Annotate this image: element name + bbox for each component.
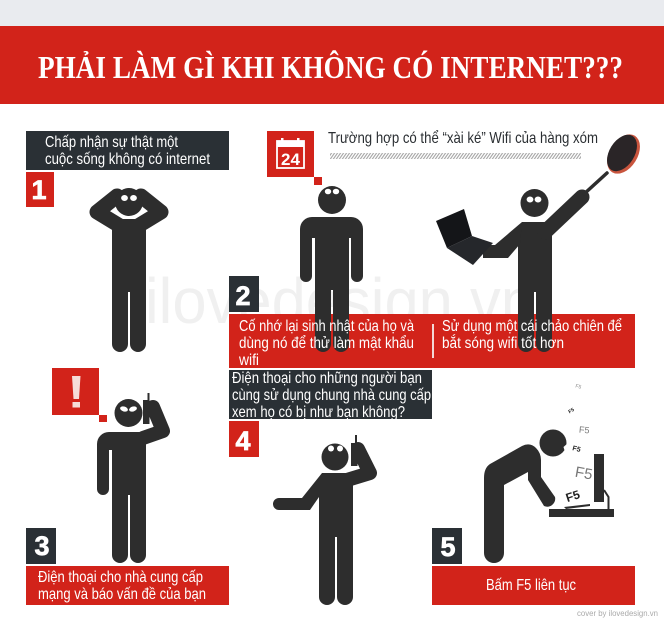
title banner <box>0 26 664 104</box>
icon: laptop <box>436 209 493 265</box>
F5 key labels: F5 <box>579 425 590 435</box>
panel: step 4: cùng sử dụng chung nhà cung cấp <box>232 387 431 404</box>
panel: step 4: Điện thoại cho những người bạn <box>232 370 422 387</box>
panel: step 2 heading with calendar: 24 <box>281 150 300 169</box>
panel: step 5 <box>432 383 635 605</box>
text: step 2 captions: bắt sóng wifi tốt hơn <box>442 333 564 352</box>
F5 key labels: F5 <box>564 487 582 505</box>
panel: step 3: mạng và báo vấn đề của bạn <box>38 586 206 603</box>
figure: person phoning provider <box>97 393 163 563</box>
panel: step 2 red bar: 2 <box>235 281 251 311</box>
panel: step 1: 1 <box>31 175 47 205</box>
F5 key labels: F5 <box>574 464 594 483</box>
figure: person with laptop and frying pan <box>436 128 647 352</box>
panel: step 2 red bar <box>229 276 635 368</box>
figure: person pressing F5 <box>484 430 568 563</box>
icon: computer <box>549 454 614 517</box>
F5 key labels <box>564 383 594 505</box>
text: step 2 captions: Cố nhớ lại sinh nhật của họ và <box>239 318 414 335</box>
panel: step 5: 5 <box>440 532 456 562</box>
panel: step 2 heading with calendar <box>267 129 598 185</box>
figure: person phoning friends <box>273 435 370 605</box>
icon: exclamation mark <box>72 376 80 408</box>
credit: cover by ilovedesign.vn <box>577 609 658 618</box>
text: step 2 captions: dùng nó để thử làm mật khẩu <box>239 334 414 352</box>
figure: hands on head <box>97 188 161 352</box>
panel: step 2 heading with calendar: Trường hợp có thể “xài ké” Wifi của hàng xóm <box>328 129 598 147</box>
panel: step 4: xem họ có bị như bạn không? <box>232 404 405 421</box>
panel: step 3 <box>26 368 229 605</box>
text: step 2 captions: Sử dụng một cái chảo chiên để <box>442 317 622 335</box>
panel: step 3: Điện thoại cho nhà cung cấp <box>38 569 203 586</box>
figure: thinking person <box>300 186 363 352</box>
panel: step 4 <box>229 370 432 605</box>
F5 key labels: F5 <box>567 407 576 415</box>
text: step 2 captions <box>238 317 622 369</box>
panel: step 3: 3 <box>34 531 50 561</box>
icon: frying pan <box>584 128 647 194</box>
panel: step 1 <box>26 131 229 352</box>
text: step 2 captions: wifi <box>238 352 259 369</box>
panel: step 1: Chấp nhận sự thật một <box>45 134 178 151</box>
panel: step 5: Bấm F5 liên tục <box>486 577 576 594</box>
panel: step 1: cuộc sống không có internet <box>45 151 210 168</box>
watermark: ilovedesign.vn <box>145 265 535 337</box>
panel: step 4: 4 <box>235 426 251 456</box>
F5 key labels: F5 <box>575 383 582 391</box>
F5 key labels: F5 <box>572 445 581 454</box>
